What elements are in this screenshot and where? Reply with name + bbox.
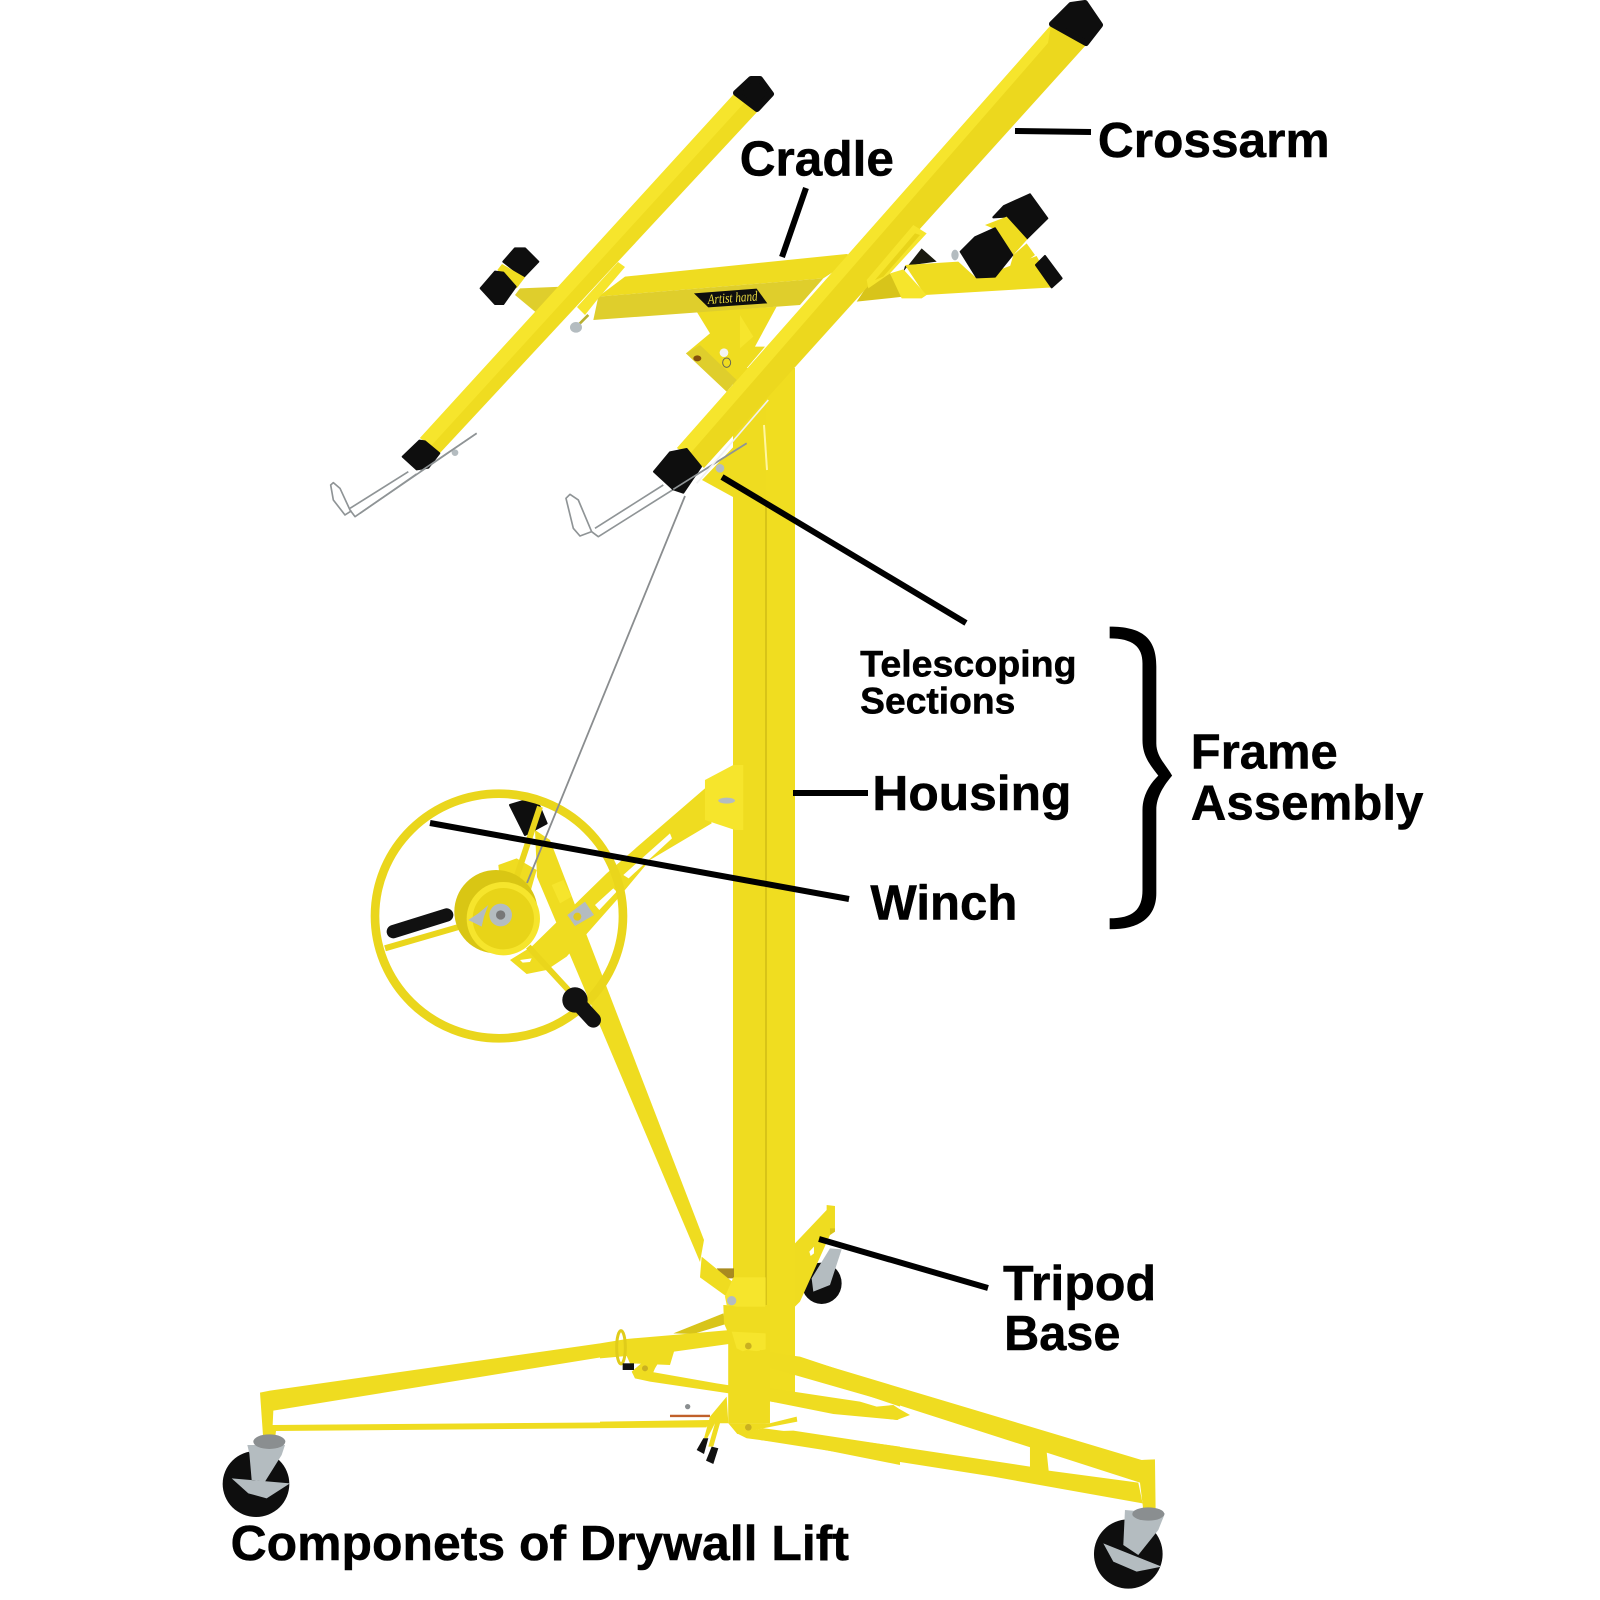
main brace foot gusset	[700, 1257, 738, 1297]
joint bolts	[642, 1343, 752, 1431]
housing bracket	[705, 765, 743, 830]
right leg	[760, 1350, 1165, 1589]
beam front face	[593, 278, 823, 320]
lower caps and wires over arms	[403, 400, 768, 493]
rear leg plate	[795, 1205, 835, 1307]
black wedge	[510, 800, 547, 835]
winch drum	[454, 870, 540, 955]
label: frame assembly: Assembly	[1191, 776, 1423, 830]
frame assembly brace	[1110, 627, 1172, 929]
leader: crossarm	[1015, 131, 1091, 132]
label: telescoping sections: Sections	[860, 680, 1015, 721]
label: telescoping sections	[860, 644, 1077, 721]
pad strap	[985, 217, 1027, 255]
crossarm top cap	[1052, 3, 1100, 43]
upper pad	[993, 194, 1047, 239]
telescoping mast	[600, 368, 900, 1465]
title: Componets of Drywall Lift	[231, 1517, 849, 1571]
dark gusset gap	[717, 1268, 734, 1278]
left arm top cap	[736, 79, 771, 109]
hooks, lower caps	[331, 433, 747, 537]
label leader lines	[430, 131, 1091, 1288]
label: crossarm: Crossarm	[1098, 114, 1330, 168]
right hook wire	[566, 443, 747, 537]
right caster wheel	[1094, 1507, 1165, 1589]
stub end cap	[1036, 256, 1062, 287]
brace end	[760, 1387, 910, 1420]
lower pad	[961, 228, 1012, 277]
right stub	[857, 248, 1053, 302]
right lower tube root	[737, 1428, 900, 1465]
leader: cradle	[782, 188, 806, 257]
short rear tube	[673, 1313, 726, 1334]
brake rod and levers	[600, 1397, 728, 1464]
left hook wire	[331, 433, 477, 517]
label: tripod base: Tripod	[1003, 1257, 1156, 1311]
left stub	[515, 287, 563, 312]
centre mast lower front	[728, 1333, 766, 1423]
brand plate	[694, 289, 767, 307]
base section	[600, 1257, 900, 1465]
release wire	[697, 400, 768, 483]
leader: tripod base	[819, 1239, 988, 1288]
winch support arm	[498, 788, 712, 974]
left pad assembly	[481, 248, 538, 304]
label: housing: Housing	[872, 767, 1071, 821]
cradle beam centre and left stub	[481, 248, 857, 333]
hand wheel	[375, 794, 623, 1038]
pivot plate with bolt	[725, 1277, 766, 1307]
wire overlays	[420, 433, 747, 489]
right upper tube	[760, 1350, 1156, 1510]
label: winch: Winch	[870, 876, 1017, 930]
collar ring	[617, 1331, 625, 1364]
drywall lift illustration	[223, 3, 1165, 1589]
base plate	[728, 1417, 797, 1434]
left caster wheel	[223, 1434, 290, 1517]
pad support	[1010, 243, 1035, 267]
arm bolt	[567, 902, 594, 926]
label: telescoping sections: Telescoping	[860, 644, 1077, 685]
clamp bolts	[452, 449, 724, 473]
rear caster wheel	[797, 1248, 842, 1304]
brand text: Artist hand	[706, 289, 759, 308]
main winch brace tube	[535, 830, 704, 1262]
drum nut and wing nut	[468, 904, 512, 927]
label: frame assembly	[1191, 725, 1423, 830]
label: tripod base: Base	[1004, 1307, 1120, 1361]
label: cradle: Cradle	[740, 133, 894, 187]
right pad and stub assembly	[857, 194, 1062, 302]
crossarm bracket plates	[867, 225, 927, 288]
lifting cable	[527, 496, 685, 883]
text labels	[231, 114, 1423, 1571]
label: frame assembly: Frame	[1191, 725, 1338, 779]
crank handle	[393, 915, 447, 932]
label: tripod base	[1003, 1257, 1156, 1361]
stabiliser brace	[633, 1372, 898, 1420]
wheel spokes	[385, 807, 568, 990]
upper joint plate	[732, 1332, 766, 1353]
leader: telescoping sections	[722, 477, 966, 623]
main crossarm	[677, 25, 1086, 468]
left leg	[223, 1343, 707, 1517]
lower grip knob	[562, 987, 593, 1020]
lever pivot	[623, 1360, 660, 1380]
hook bolt	[951, 250, 959, 260]
left leg inner tube	[600, 1330, 733, 1365]
left arm bottom cap	[403, 441, 439, 469]
beam top face	[598, 254, 857, 297]
leader: housing	[793, 790, 868, 796]
left leg tube and rod	[260, 1343, 707, 1440]
right upper tube root	[737, 1350, 900, 1407]
cradle left arm bracket	[577, 262, 625, 315]
lower mast collar	[723, 1305, 770, 1423]
winch assembly	[375, 765, 743, 1038]
right lower tube with strut	[760, 1431, 1143, 1503]
left cradle arm	[420, 94, 758, 453]
leader: winch	[430, 823, 849, 899]
mast head bracket	[686, 307, 777, 392]
left arm clamp bolt	[570, 315, 588, 333]
crossarm bottom cap	[654, 449, 701, 493]
upper and lower mast body	[702, 368, 795, 1398]
